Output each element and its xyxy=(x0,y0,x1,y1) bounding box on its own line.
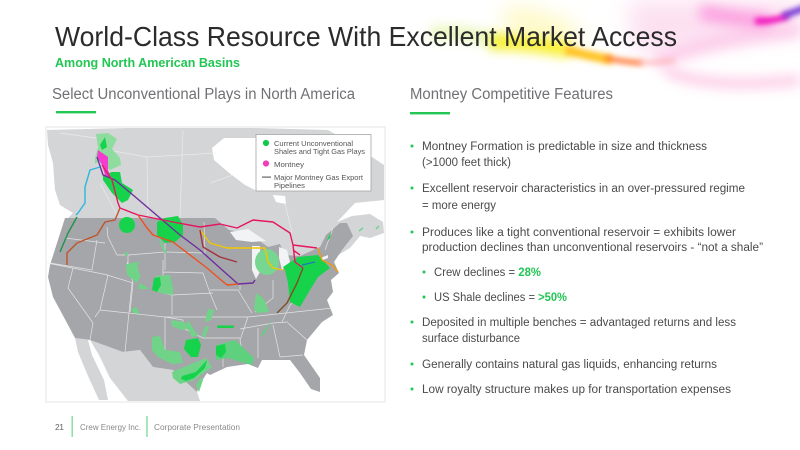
footer: Crew Energy Inc. xyxy=(80,422,141,432)
bullet: reservoir xyxy=(410,183,745,212)
sub-bullet: US shale declines: US Shale declines = >50% xyxy=(434,292,567,304)
map legend xyxy=(256,134,371,191)
bullet: benches: Deposited in multiple benches = advantaged returns and less xyxy=(422,317,736,329)
map: Hudson Bay xyxy=(212,138,286,204)
map: Montney play xyxy=(97,150,111,178)
map: Great Lakes xyxy=(230,229,328,279)
legend: pipelines xyxy=(262,173,363,190)
map: Canada xyxy=(47,128,384,262)
legend: unconventional plays: Current Unconventional xyxy=(274,139,353,148)
legend: pipelines: Major Montney Gas Export xyxy=(274,173,363,182)
bullet: formation xyxy=(410,141,707,169)
bullet: production xyxy=(410,227,763,254)
map: light green unconventional plays xyxy=(95,133,379,392)
footer: 21 xyxy=(55,422,64,432)
legend: pipelines: Pipelines xyxy=(274,181,305,190)
bullet: reservoir: Excellent reservoir characteristics in an over-pressured regime xyxy=(422,183,745,195)
decorative colour swoosh xyxy=(430,0,800,83)
bullet: formation: (>1000 feet thick) xyxy=(422,157,511,169)
bullet: benches: surface disturbance xyxy=(422,333,520,345)
map: state and province lines xyxy=(47,130,333,367)
map: export pipelines xyxy=(60,157,338,313)
panel: North America map xyxy=(46,127,385,402)
map: bright green unconventional plays xyxy=(100,137,331,381)
sub-bullet: Crew declines: Crew declines = 28% xyxy=(434,267,541,279)
bullet: production: production declines than unconventional reservoirs - “not a shale” xyxy=(422,242,763,254)
right panel heading: Montney Competitive Features xyxy=(410,86,613,103)
legend: unconventional plays: Shales and Tight Gas Plays xyxy=(274,147,365,156)
subtitle: Among North American Basins xyxy=(55,55,240,70)
panel: Montney competitive features list xyxy=(410,141,763,396)
legend: Montney: Montney xyxy=(274,160,304,169)
footer: Corporate Presentation xyxy=(154,422,240,432)
bullet: royalty: Low royalty structure makes up for transportation expenses xyxy=(422,384,731,396)
legend: unconventional plays xyxy=(263,139,365,156)
bullet: reservoir: = more energy xyxy=(422,200,496,212)
map: United States xyxy=(48,218,353,392)
bullet: liquids: Generally contains natural gas liquids, enhancing returns xyxy=(422,359,717,371)
bullet: benches xyxy=(410,317,736,345)
map: Mexico xyxy=(75,338,200,401)
footer xyxy=(55,416,240,437)
title: World-Class Resource With Excellent Market Access xyxy=(55,21,677,52)
left panel heading: Select Unconventional Plays in North America xyxy=(52,86,355,103)
bullet: production: Produces like a tight conventional reservoir = exhibits lower xyxy=(422,227,736,239)
bullet: formation: Montney Formation is predictable in size and thickness xyxy=(422,141,707,153)
